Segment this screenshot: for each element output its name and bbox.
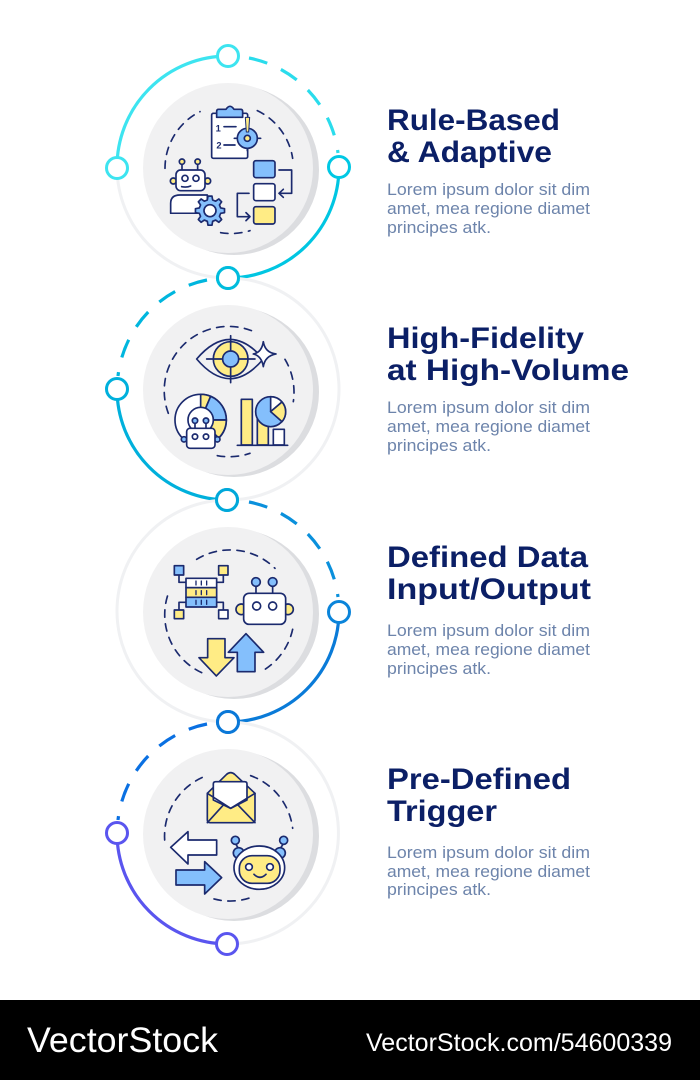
description: step 3: amet, mea regione diamet bbox=[387, 641, 590, 659]
icon: eye, analytics and robot bbox=[164, 326, 294, 457]
description: step 2: principes atk. bbox=[387, 437, 491, 455]
icon: envelope, arrows and robot bbox=[165, 773, 293, 901]
description: step 3: principes atk. bbox=[387, 660, 491, 678]
text: step 1 bbox=[387, 104, 590, 237]
icon: rules, robot and flow: 2 bbox=[216, 141, 222, 151]
panel: step 2 circle bbox=[106, 268, 339, 510]
heading: Pre-Defined Trigger: Pre-Defined bbox=[387, 763, 571, 796]
description: step 2: Lorem ipsum dolor sit dim bbox=[387, 399, 590, 417]
description: step 1: principes atk. bbox=[387, 219, 491, 237]
icon: rules, robot and flow: 1 bbox=[216, 123, 221, 133]
description: step 4: amet, mea regione diamet bbox=[387, 863, 590, 881]
icon: data server, robot and arrows bbox=[165, 550, 293, 676]
heading: High-Fidelity at High-Volume: High-Fidelity bbox=[387, 322, 584, 355]
panel: step 1 circle bbox=[106, 46, 350, 288]
text: step 3 bbox=[387, 541, 591, 678]
panel: step 4 circle bbox=[106, 712, 338, 954]
description: step 1: amet, mea regione diamet bbox=[387, 200, 590, 218]
panel: step 3 circle bbox=[117, 490, 350, 732]
heading: Defined Data Input/Output: Input/Output bbox=[387, 573, 591, 606]
description: step 3: Lorem ipsum dolor sit dim bbox=[387, 622, 590, 640]
footer image id: VectorStock.com/54600339 bbox=[366, 1029, 672, 1057]
icon: rules, robot and flow bbox=[165, 106, 293, 234]
description: step 4: Lorem ipsum dolor sit dim bbox=[387, 844, 590, 862]
heading: Pre-Defined Trigger: Trigger bbox=[387, 795, 497, 828]
description: step 4: principes atk. bbox=[387, 881, 491, 899]
footer logo text: VectorStock bbox=[27, 1021, 219, 1060]
heading: Defined Data Input/Output: Defined Data bbox=[387, 541, 588, 574]
text: step 2 bbox=[387, 322, 629, 455]
heading: High-Fidelity at High-Volume: at High-Volume bbox=[387, 354, 629, 387]
description: step 1: Lorem ipsum dolor sit dim bbox=[387, 181, 590, 199]
text: step 4 bbox=[387, 763, 590, 899]
description: step 2: amet, mea regione diamet bbox=[387, 418, 590, 436]
heading: Rule-Based & Adaptive: Rule-Based bbox=[387, 104, 560, 137]
heading: Rule-Based & Adaptive: & Adaptive bbox=[387, 136, 552, 169]
footer bar bbox=[0, 1000, 700, 1080]
